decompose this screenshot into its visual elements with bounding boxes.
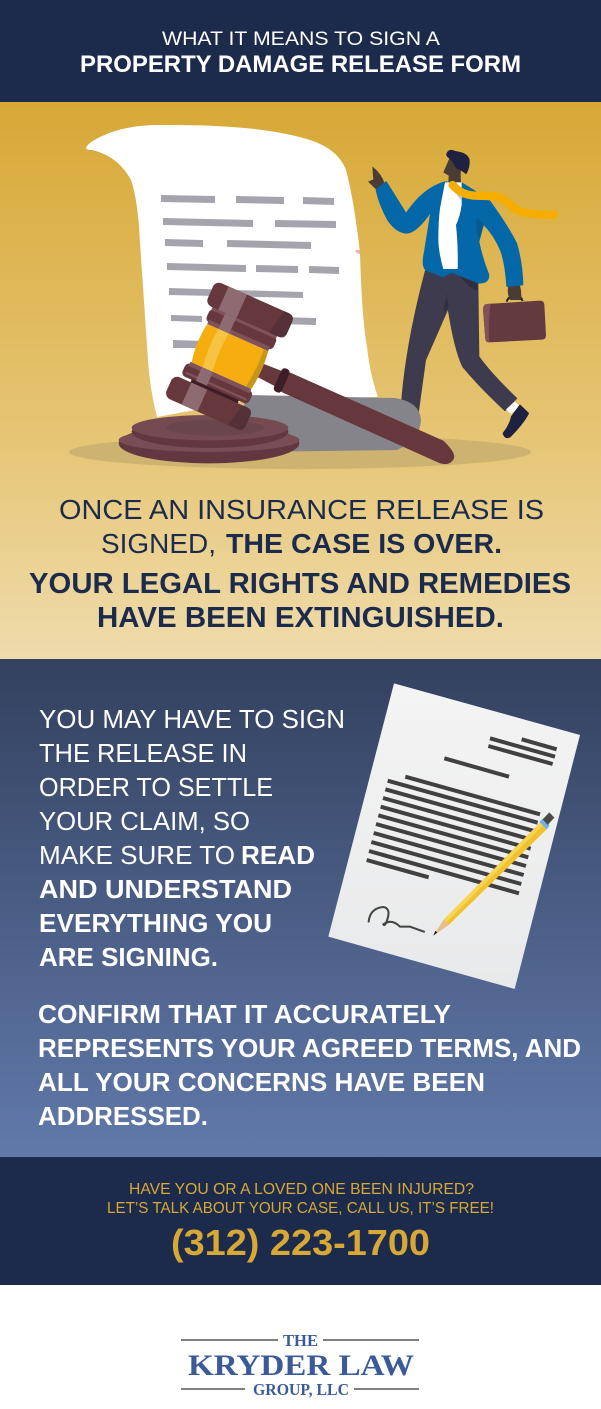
gavel collar <box>273 367 291 394</box>
text block: read and understand: THE RELEASE IN <box>39 738 247 768</box>
necktie <box>453 185 554 215</box>
warning line two regular: SIGNED, <box>101 528 216 559</box>
illustration: ground shadow <box>69 435 531 469</box>
gavel bottom ring <box>181 362 254 405</box>
heading: title line one: WHAT IT MEANS TO SIGN A <box>162 29 440 50</box>
gavel <box>164 281 481 515</box>
hair <box>447 151 469 173</box>
sound block <box>119 415 299 463</box>
text block: read and understand: ARE SIGNING. <box>39 942 218 972</box>
warning line one: ONCE AN INSURANCE RELEASE IS <box>59 494 544 525</box>
jacket <box>377 182 522 286</box>
heading: title line two: PROPERTY DAMAGE RELEASE FORM <box>80 51 521 78</box>
text block: read and understand: AND UNDERSTAND <box>39 874 292 904</box>
illustration: scroll document <box>86 125 378 417</box>
gavel top ring <box>205 308 278 351</box>
phone number: (312) 223-1700 <box>171 1222 430 1263</box>
logo line two: KRYDER LAW <box>188 1349 414 1382</box>
neck and face <box>443 158 462 183</box>
illustration: gavel and sound block <box>119 281 481 515</box>
panel: call to action <box>0 1157 601 1285</box>
trousers <box>402 269 516 413</box>
gavel handle <box>255 361 459 468</box>
warning line three: YOUR LEGAL RIGHTS AND REMEDIES <box>29 568 571 600</box>
warning line two bold: THE CASE IS OVER. <box>226 528 502 559</box>
text block: release warning <box>29 494 571 634</box>
text placeholder lines <box>161 195 339 348</box>
callout line two: LET’S TALK ABOUT YOUR CASE, CALL US, IT’S FREE! <box>107 1200 494 1217</box>
text block: confirm terms <box>38 999 581 1131</box>
illustration: signed document with pencil <box>328 683 580 989</box>
text block: read and understand: EVERYTHING YOU <box>39 908 272 938</box>
callout line one: HAVE YOU OR A LOVED ONE BEEN INJURED? <box>129 1181 474 1198</box>
text block: confirm terms: REPRESENTS YOUR AGREED TERMS, AND <box>38 1033 581 1063</box>
shirt <box>438 182 462 269</box>
text block: read and understand: ORDER TO SETTLE <box>39 772 273 802</box>
trailing hand <box>508 285 521 300</box>
signature <box>369 907 424 932</box>
raised hand <box>368 167 384 190</box>
text block: confirm terms: ALL YOUR CONCERNS HAVE BEEN <box>38 1067 485 1097</box>
lower body <box>402 269 546 437</box>
illustration: walking businessman <box>368 151 554 437</box>
logo: Kryder Law Group <box>181 1331 419 1399</box>
text block: confirm terms: ADDRESSED. <box>38 1101 208 1131</box>
text block: read and understand: YOU MAY HAVE TO SIGN <box>39 704 345 734</box>
panel: header <box>0 0 601 102</box>
panel: gold illustration section <box>0 102 601 659</box>
gavel bottom head <box>164 375 253 432</box>
text block: confirm terms: CONFIRM THAT IT ACCURATELY <box>38 999 451 1029</box>
paper sheet <box>328 683 580 989</box>
text block: read and understand <box>39 704 345 972</box>
illustration: gray gavel block <box>240 395 421 452</box>
document text lines <box>367 738 557 893</box>
panel: blue advice section <box>0 659 601 1157</box>
pencil <box>433 812 554 936</box>
logo line three: GROUP, LLC <box>253 1380 349 1399</box>
text block: read and understand: MAKE SURE TO <box>39 840 235 870</box>
text block: read and understand: READ <box>241 840 315 870</box>
logo line one: THE <box>283 1331 318 1350</box>
text block: read and understand: YOUR CLAIM, SO <box>39 806 250 836</box>
warning line four: HAVE BEEN EXTINGUISHED. <box>97 602 504 634</box>
icon: pink accent <box>355 250 360 254</box>
gavel yellow barrel <box>189 323 270 390</box>
upper body <box>368 151 554 286</box>
gavel top head <box>205 281 295 339</box>
briefcase <box>483 296 546 342</box>
shoe and sock <box>503 402 528 437</box>
